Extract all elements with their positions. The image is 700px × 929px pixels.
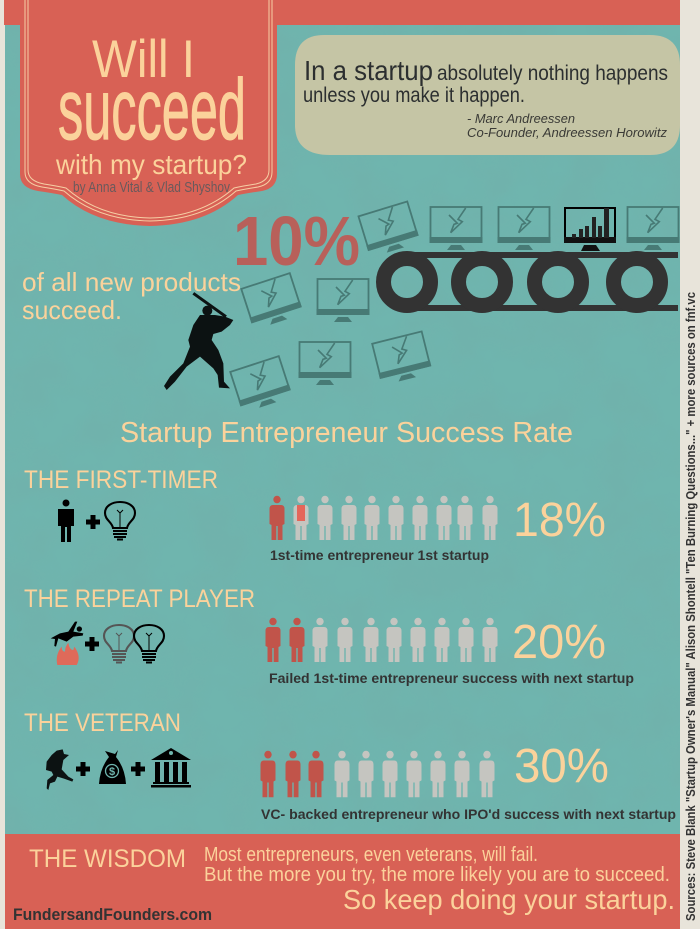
repeat player heading: THE REPEAT PLAYER [24, 585, 255, 613]
quote box [295, 35, 680, 155]
conveyor belt [384, 252, 678, 311]
icon: runner, money bag, bank: $ [109, 766, 115, 778]
quote attribution: - Marc Andreessen [467, 111, 575, 126]
wisdom text: Most entrepreneurs, even veterans, will fail. [204, 844, 538, 866]
top red bar [4, 0, 680, 25]
quote text: unless you make it happen. [303, 84, 525, 107]
title text: succeed [58, 62, 246, 158]
value: 20 percent: 20% [512, 616, 606, 669]
icon: runner, money bag, bank [46, 748, 191, 790]
value: 30 percent: 30% [514, 740, 609, 793]
pictogram: 18 percent [270, 496, 498, 540]
quote attribution [467, 111, 667, 140]
quote text: In a startup [304, 55, 433, 86]
title text [55, 30, 247, 180]
title banner [20, 0, 277, 226]
first-timer caption: 1st-time entrepreneur 1st startup [270, 547, 489, 563]
section: the veteran [24, 709, 676, 822]
quote text [303, 55, 668, 107]
icon: person plus bulb [58, 500, 135, 542]
ten percent caption [22, 267, 241, 325]
ten percent caption: succeed. [22, 295, 122, 325]
title text: Will I [92, 30, 195, 89]
successful monitor with bar chart [564, 208, 616, 251]
section heading: Startup Entrepreneur Success Rate [120, 417, 573, 449]
ten percent caption: of all new products [22, 267, 241, 297]
wisdom text: But the more you try, the more likely you are to succeed. [204, 864, 670, 886]
wisdom text [204, 844, 670, 886]
sources text: Sources: Steve Blank "Startup Owner's Manual" Alison Shontell "Ten Burning Questions..." + more sources on fnf.vc [683, 292, 698, 921]
title text: with my startup? [55, 149, 247, 180]
first-timer heading: THE FIRST-TIMER [24, 466, 218, 494]
ten percent figure: 10% [233, 202, 360, 280]
repeat player caption: Failed 1st-time entrepreneur success with next startup [269, 670, 634, 686]
section: the repeat player [24, 585, 634, 686]
pictogram: 20 percent [266, 618, 498, 662]
broken monitors [229, 201, 680, 413]
quote attribution: Co-Founder, Andreessen Horowitz [467, 125, 667, 140]
section: the first-timer [24, 466, 606, 563]
veteran caption: VC- backed entrepreneur who IPO'd success with next startup [261, 806, 676, 822]
byline: by Anna Vital & Vlad Shyshov [73, 179, 230, 196]
bottom panel: the wisdom [5, 834, 680, 929]
pictogram: 30 percent [260, 751, 494, 797]
veteran heading: THE VETERAN [24, 709, 181, 737]
wisdom heading: THE WISDOM [29, 845, 186, 873]
quote text: absolutely nothing happens [437, 62, 668, 85]
value: 18 percent: 18% [513, 494, 606, 547]
website: FundersandFounders.com [13, 905, 212, 924]
icon: baseball batter [164, 293, 233, 390]
wisdom conclusion: So keep doing your startup. [343, 884, 675, 915]
icon: falling person, fire, two bulbs [51, 622, 164, 665]
